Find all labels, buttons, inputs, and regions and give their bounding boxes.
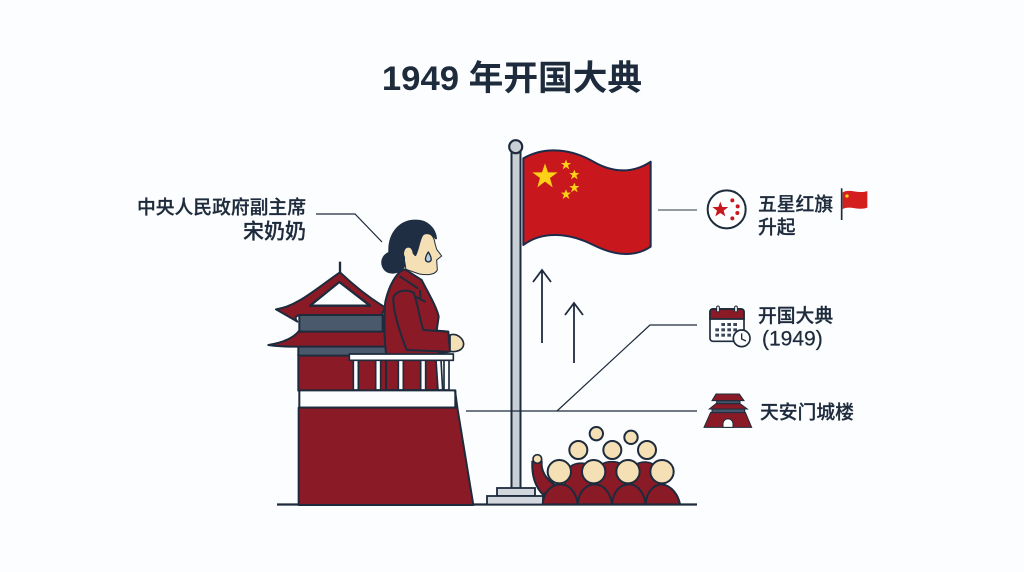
calendar header (710, 309, 744, 319)
label: vice chairman (137, 196, 306, 244)
small flag pole (839, 188, 844, 220)
tower white band (299, 390, 455, 408)
national flag (523, 150, 651, 254)
leader line: ceremony (557, 325, 697, 411)
label line one: 五星红旗 (758, 194, 833, 214)
lower roof (268, 331, 387, 347)
ear (404, 248, 413, 259)
rising arrow left (533, 270, 551, 343)
white band slope edge (455, 390, 457, 408)
roof spire (336, 262, 343, 273)
icon wall (704, 412, 752, 427)
icon big star (712, 202, 728, 216)
label line two: (1949) (762, 328, 823, 350)
icon lower band (712, 409, 745, 413)
pole ball (509, 140, 522, 153)
icon ring (708, 190, 746, 228)
lower gray band (298, 345, 387, 356)
tower lower wall (299, 408, 473, 505)
flagpole (487, 140, 543, 504)
label: founding ceremony (758, 305, 833, 350)
front row heads (548, 460, 571, 483)
railing top bar (349, 354, 453, 360)
small flag star (845, 194, 849, 198)
collar knot (399, 276, 426, 302)
illustration: Tiananmen gate tower (268, 262, 473, 505)
raised arm (532, 462, 555, 495)
rising arrow right (565, 303, 583, 363)
tear (425, 252, 431, 262)
label: flag raising (758, 194, 833, 238)
flag cloth (523, 150, 651, 254)
pole base (497, 488, 535, 496)
roof triangle (310, 282, 370, 306)
back row bodies (565, 462, 662, 502)
leader line: gate tower (466, 410, 697, 412)
upper roof (276, 272, 385, 322)
icon top roof (712, 394, 744, 401)
raised hand (533, 455, 542, 463)
icon small stars (730, 198, 740, 220)
label line one: 中央人民政府副主席 (137, 196, 306, 218)
label line one: 开国大典 (758, 305, 833, 326)
figure sleeve (393, 291, 448, 352)
flag stars (532, 160, 579, 199)
icon gate (723, 419, 733, 427)
icon: gate tower (704, 394, 752, 427)
small flag cloth (843, 191, 867, 209)
front row bodies (543, 484, 578, 504)
pole shaft (512, 150, 520, 490)
icon: star circle (708, 190, 746, 228)
calendar page (710, 309, 744, 341)
icon middle band (717, 401, 740, 404)
label line two: 升起 (758, 216, 796, 238)
leader line: vice chairman (316, 214, 382, 242)
distant heads (590, 427, 603, 440)
back row heads (569, 441, 587, 459)
label: gate tower: 天安门城楼 (760, 402, 854, 422)
icon lower roof (709, 404, 747, 409)
hand (450, 334, 464, 352)
figure: Soong Ching-ling (349, 221, 464, 390)
calendar grid (715, 323, 737, 337)
gray band between roofs (299, 315, 383, 332)
figure body (384, 269, 450, 390)
label line two: 宋奶奶 (243, 220, 306, 244)
crowd (532, 427, 680, 504)
icon: small flag (842, 188, 867, 220)
hair (382, 221, 436, 273)
icon: calendar and clock (710, 306, 750, 347)
leader line: flag (658, 209, 697, 211)
calendar rings (717, 306, 719, 312)
face (403, 233, 442, 275)
ground line (277, 503, 697, 506)
railing posts (353, 360, 449, 390)
clock (733, 330, 750, 347)
clock hands (742, 333, 746, 341)
tower upper wall (298, 354, 398, 391)
title: 1949 年开国大典 (382, 59, 642, 98)
